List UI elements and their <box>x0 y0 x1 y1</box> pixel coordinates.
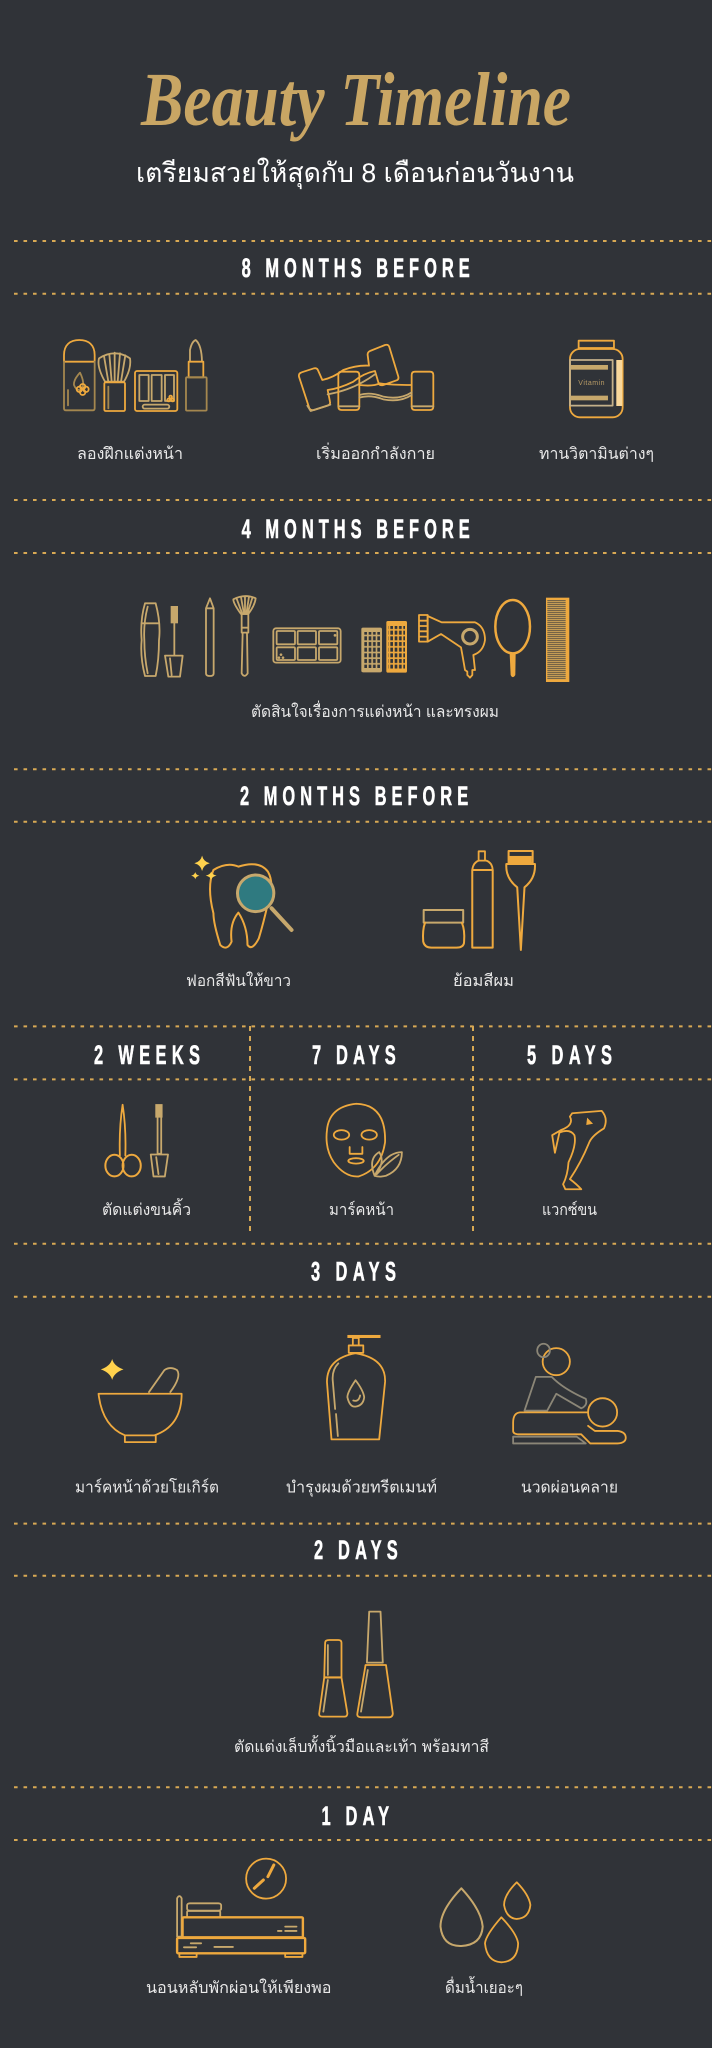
caption: try makeup: ลองฝึกแต่งหน้า <box>77 445 183 463</box>
icon: brow scissors and mascara <box>105 1104 168 1176</box>
caption: dye hair: ย้อมสีผม <box>453 972 514 990</box>
caption: waxing: แวกซ์ขน <box>542 1200 597 1219</box>
heading: 5 days: 5 DAYS <box>527 1040 612 1070</box>
heading: 2 days: 2 DAYS <box>314 1535 398 1565</box>
icon: bed and clock <box>177 1859 305 1957</box>
title: Beauty Timeline <box>140 58 571 142</box>
panel: 2 days <box>234 1535 489 1756</box>
heading: 2 months before: 2 MONTHS BEFORE <box>240 781 468 811</box>
icon: vitamin jar <box>570 341 623 417</box>
icon: hair dye set <box>423 851 535 950</box>
icon: tooth with magnifier <box>191 856 292 948</box>
heading: 4 months before: 4 MONTHS BEFORE <box>242 514 470 544</box>
caption: trim brows: ตัดแต่งขนคิ้ว <box>102 1198 191 1219</box>
heading: 1 day: 1 DAY <box>322 1801 389 1831</box>
icon: vitamin jar: Vitamin <box>578 380 605 387</box>
icon: lotion bottle <box>327 1335 385 1439</box>
icon: massage <box>513 1344 626 1443</box>
caption: start exercise: เริ่มออกกำลังกาย <box>316 442 435 463</box>
heading: 3 days: 3 DAYS <box>311 1257 396 1287</box>
icon: rollers, dryer, mirror, comb <box>361 598 569 682</box>
panel: 1 day <box>146 1801 530 1997</box>
panel: 4 months before <box>141 514 569 721</box>
caption: relaxing massage: นวดผ่อนคลาย <box>521 1480 618 1497</box>
panel: 2 months before <box>186 781 535 990</box>
heading: 8 months before: 8 MONTHS BEFORE <box>242 253 470 283</box>
caption: drink water: ดื่มน้ำเยอะๆ <box>445 1976 523 1997</box>
panel: 2 weeks <box>94 1040 200 1219</box>
panel: 5 days <box>527 1040 612 1219</box>
icon: dumbbells <box>299 345 433 411</box>
icon: water drops <box>440 1882 530 1962</box>
caption: nails: ตัดแต่งเล็บทั้งนิ้วมือและเท้า พร้อมทาสี <box>234 1735 489 1756</box>
caption: take vitamins: ทานวิตามินต่างๆ <box>539 446 654 463</box>
caption: yogurt mask: มาร์คหน้าด้วยโยเกิร์ต <box>75 1478 219 1497</box>
icon: leg <box>552 1111 606 1189</box>
panel: 8 months before <box>64 253 654 463</box>
icon: makeup set <box>64 340 207 411</box>
caption: face mask: มาร์คหน้า <box>329 1200 394 1219</box>
subtitle: เตรียมสวยให้สุดกับ 8 เดือนก่อนวันงาน <box>136 157 574 190</box>
caption: choose makeup and hair: ตัดสินใจเรื่องการแต่งหน้า และทรงผม <box>251 700 499 721</box>
heading: 7 days: 7 DAYS <box>312 1040 396 1070</box>
panel: 3 days <box>75 1257 626 1498</box>
icon: face mask with leaves <box>326 1104 402 1177</box>
caption: get enough sleep: นอนหลับพักผ่อนให้เพียงพอ <box>146 1978 332 1997</box>
caption: whiten teeth: ฟอกสีฟันให้ขาว <box>186 971 291 990</box>
icon: nail polish <box>319 1612 393 1717</box>
panel: 7 days <box>312 1040 402 1219</box>
caption: hair treatment: บำรุงผมด้วยทรีตเมนท์ <box>286 1478 437 1498</box>
icon: mascara, pencil, brush, palette <box>141 596 341 677</box>
heading: 2 weeks: 2 WEEKS <box>94 1040 200 1070</box>
icon: mortar and pestle <box>99 1359 182 1442</box>
